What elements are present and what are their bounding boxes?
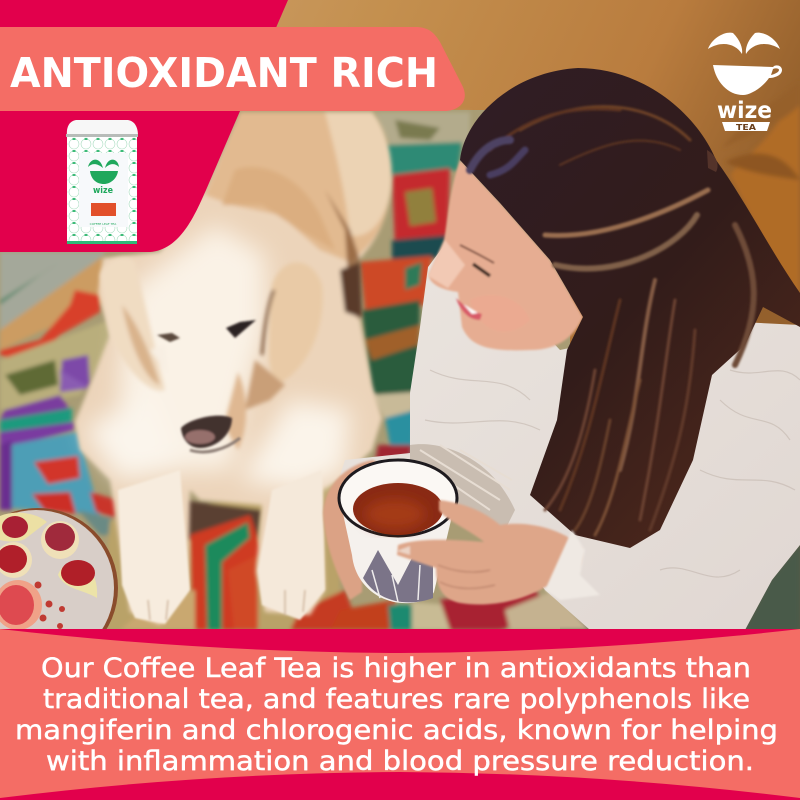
woman: [323, 68, 800, 630]
trousers: [722, 82, 800, 300]
hand left: [323, 460, 378, 600]
panel: bottom band: [0, 629, 800, 800]
sweater: [340, 235, 800, 630]
icon: product tin: COFFEE LEAF TEA: [90, 222, 117, 226]
dog nose: [181, 416, 240, 452]
left rug: [0, 252, 105, 335]
left ear: [100, 258, 165, 391]
title: ANTIOXIDANT RICH: [10, 49, 438, 97]
body text: Our Coffee Leaf Tea is higher in antioxidants than: [41, 653, 751, 684]
bottom rug: [100, 480, 340, 630]
mug: [339, 460, 457, 603]
body text: traditional tea, and features rare polyphenols like: [43, 684, 750, 715]
dog body and tail: [75, 112, 392, 625]
body text: with inflammation and blood pressure reduction.: [46, 746, 754, 777]
dog head and chest: [85, 225, 350, 490]
right ear: [269, 262, 323, 382]
dog legs: [118, 470, 325, 624]
wooden floor: [0, 0, 800, 420]
dog: [75, 112, 392, 625]
sleeve cuff: [545, 530, 600, 600]
hair: [460, 68, 800, 548]
rug background: [0, 110, 800, 635]
icon: product tin: wize: [93, 186, 113, 196]
icon: wize tea logo: TEA: [736, 123, 757, 132]
upper rug: [375, 112, 470, 145]
icon: fruit plate: [0, 508, 118, 668]
body text: [15, 653, 778, 777]
body text: mangiferin and chlorogenic acids, known for helping: [15, 715, 778, 746]
hand right: [397, 500, 582, 605]
face: [428, 160, 583, 350]
panel: crimson top corner: [0, 0, 288, 252]
icon: wize tea logo: [708, 33, 782, 132]
dog eyes: [157, 320, 256, 342]
icon: product tin: [66, 120, 138, 244]
heading banner: [0, 27, 465, 111]
icon: wize tea logo: wize: [717, 98, 772, 124]
